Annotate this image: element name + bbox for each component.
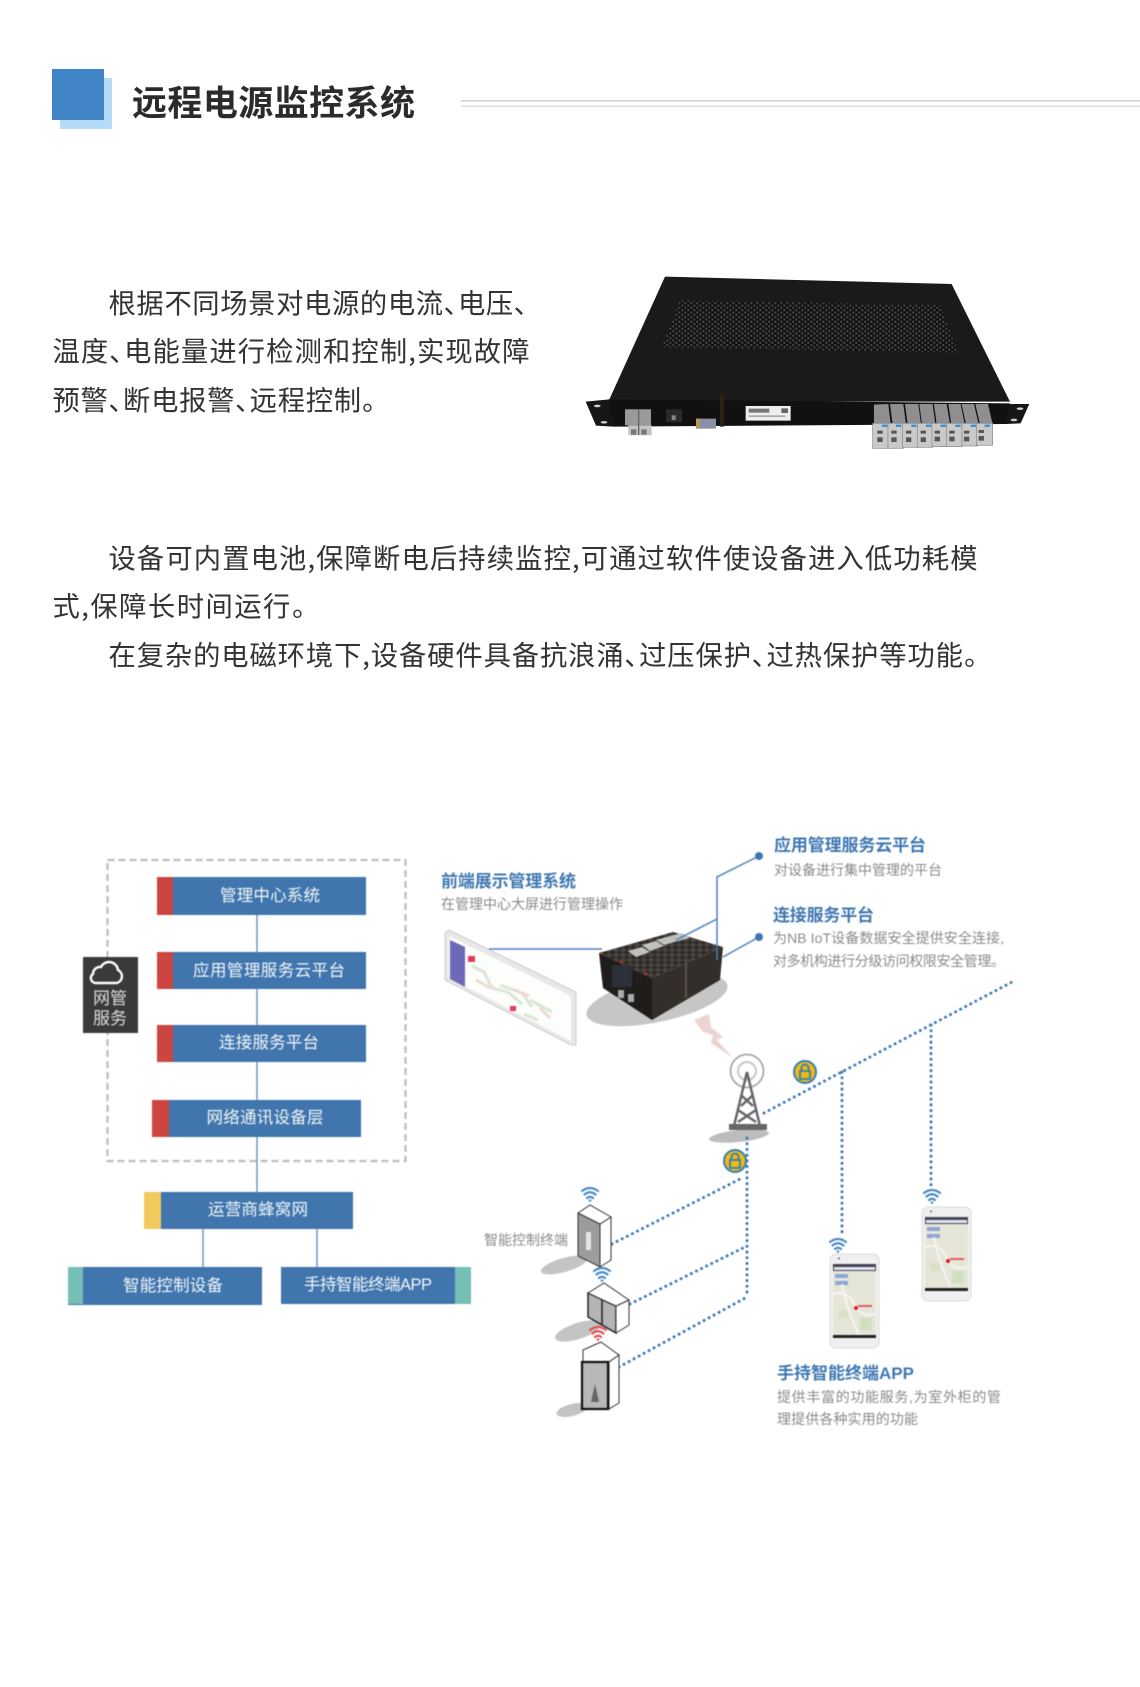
- callout dots: [755, 852, 763, 941]
- box: 网络通讯设备层: [152, 1100, 361, 1137]
- icon: lightning signal: [694, 1014, 733, 1058]
- device photo: rack power monitor: [586, 277, 1029, 448]
- box: 管理中心系统: [157, 877, 366, 915]
- icon: cloud: [91, 962, 122, 983]
- text block: monitoring intro: [52, 281, 530, 418]
- device label: [746, 406, 791, 421]
- label: handheld app: 手持智能终端APP: [777, 1363, 914, 1383]
- label: handheld app: 提供丰富的功能服务,为室外柜的管: [777, 1389, 1001, 1405]
- label: connection service platform: 为NB IoT设备数据安全提供安全连接,: [773, 930, 1004, 946]
- dashed management frame: [108, 860, 406, 1161]
- output terminals: [873, 404, 993, 448]
- icon: terminal cabinet 3: [555, 1342, 619, 1420]
- text block: battery and protection: 式,保障长时间运行。: [52, 584, 306, 624]
- icon: phone map 1: [830, 1254, 879, 1348]
- text block: monitoring intro: 根据不同场景对电源的电流、电压、: [108, 281, 528, 321]
- connector: screen to server: [489, 948, 602, 950]
- label: handheld app: [777, 1363, 1001, 1427]
- top cover: [608, 277, 1010, 402]
- icon: wifi above phone 1: [830, 1239, 846, 1253]
- box: 手持智能终端APP: 手持智能终端APP: [304, 1275, 432, 1294]
- label: connection service platform: 连接服务平台: [773, 905, 874, 925]
- network management badge: 网管: [93, 989, 127, 1008]
- box: 运营商蜂窝网: 运营商蜂窝网: [208, 1200, 308, 1219]
- switch and ports: [666, 395, 724, 429]
- section heading: [52, 69, 1140, 129]
- label: cloud platform: 应用管理服务云平台: [774, 835, 926, 855]
- icon: heading blue squares: [52, 69, 112, 129]
- panel: network topology diagram: [441, 835, 1014, 1427]
- box: 应用管理服务云平台: 应用管理服务云平台: [193, 961, 345, 980]
- icon: signal tower: [709, 1054, 769, 1145]
- icon: security lock 2: [724, 1150, 746, 1172]
- text block: battery and protection: 在复杂的电磁环境下,设备硬件具备抗浪涌、过压保护、过热保护等功能。: [108, 633, 978, 673]
- label: cloud platform: [774, 835, 942, 878]
- front panel: [608, 399, 1010, 427]
- icon: security lock 1: [794, 1061, 816, 1083]
- label: handheld app: 理提供各种实用的功能: [777, 1411, 918, 1427]
- label: connection service platform: [773, 905, 1005, 969]
- label: smart control terminal: 智能控制终端: [484, 1232, 568, 1248]
- text block: battery and protection: [52, 536, 978, 673]
- label: front display system: 在管理中心大屏进行管理操作: [441, 896, 623, 912]
- box: 应用管理服务云平台: [157, 952, 366, 989]
- network management badge: [83, 957, 138, 1033]
- box: 连接服务平台: 连接服务平台: [219, 1033, 319, 1052]
- box: 运营商蜂窝网: [144, 1192, 353, 1229]
- dotted network links: [612, 981, 1014, 1367]
- box: 智能控制设备: 智能控制设备: [123, 1276, 224, 1295]
- icon: wifi above cabinet 1: [582, 1188, 598, 1202]
- label: front display system: 前端展示管理系统: [441, 871, 576, 891]
- label: front display system: [441, 871, 623, 912]
- ventilation mesh: [662, 301, 958, 353]
- heading title: 远程电源监控系统: [132, 84, 415, 124]
- label: cloud platform: 对设备进行集中管理的平台: [774, 862, 942, 878]
- text block: monitoring intro: 温度、电能量进行检测和控制,实现故障: [52, 329, 530, 369]
- box: 手持智能终端APP: [281, 1267, 471, 1304]
- box: 连接服务平台: [157, 1025, 366, 1062]
- icon: wifi above phone 2: [924, 1190, 940, 1204]
- connector: callout leader lines: [676, 856, 759, 960]
- icon: video wall screen: [445, 930, 576, 1045]
- power breaker: [625, 409, 652, 435]
- box: 管理中心系统: 管理中心系统: [220, 886, 320, 905]
- panel: layered architecture diagram: [68, 860, 471, 1305]
- text block: battery and protection: 设备可内置电池,保障断电后持续监控,可通过软件使设备进入低功耗模: [108, 536, 978, 576]
- mounting ears: [586, 399, 1029, 427]
- icon: wifi above cabinet 2: [594, 1268, 610, 1282]
- connector lines: [203, 915, 317, 1267]
- label: connection service platform: 对多机构进行分级访问权限安全管理。: [773, 953, 1005, 969]
- icon: terminal cabinet 1: [539, 1205, 611, 1278]
- text block: monitoring intro: 预警、断电报警、远程控制。: [52, 378, 376, 418]
- icon: server cabinet: [582, 932, 732, 1036]
- icon: terminal cabinet 2: [553, 1283, 629, 1346]
- box: 智能控制设备: [68, 1267, 262, 1305]
- box: 网络通讯设备层: 网络通讯设备层: [206, 1108, 324, 1127]
- icon: red wifi alert: [590, 1327, 606, 1341]
- icon: phone map 2: [922, 1207, 971, 1301]
- network management badge: 服务: [93, 1009, 127, 1028]
